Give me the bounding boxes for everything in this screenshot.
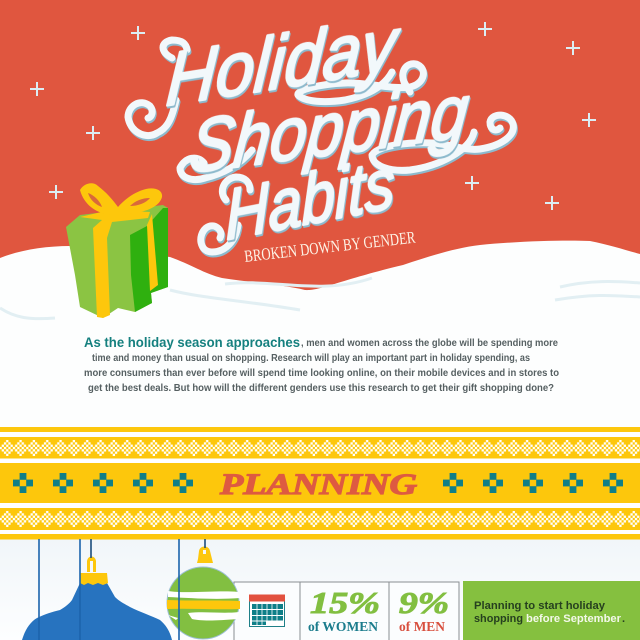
subtitle: BROKEN DOWN BY GENDER <box>243 228 417 266</box>
ornament: green bauble <box>167 546 240 639</box>
stat: women <box>308 585 380 634</box>
intro text block <box>84 334 559 394</box>
banner motifs right <box>443 473 623 493</box>
stat: men: 9% <box>399 585 449 620</box>
gift bow <box>80 183 162 215</box>
title lettering <box>128 0 513 255</box>
panel: green callout: . <box>622 613 625 625</box>
lower section background <box>0 540 640 640</box>
stat: men: of MEN <box>399 619 445 634</box>
ornament: blue bauble <box>22 556 172 640</box>
stat: women: 15% <box>310 585 380 620</box>
panel: red header background <box>0 0 640 300</box>
hanging strings <box>39 539 205 640</box>
sparkle stars <box>30 22 596 210</box>
snow hills <box>0 241 640 440</box>
ornaments <box>22 539 240 640</box>
intro text block: time and money than usual on shopping. Research will play an important part in holiday spending, as <box>92 353 531 364</box>
icon: calendar <box>249 594 285 626</box>
stat: women: of WOMEN <box>308 619 378 634</box>
panel: green callout: before September <box>526 613 622 625</box>
stat: men <box>399 585 449 634</box>
intro text block: , men and women across the globe will be spending more <box>301 338 559 349</box>
title swashes <box>128 40 513 252</box>
panel: green callout: Planning to start holiday <box>474 600 606 612</box>
title line: Shopping: Shopping <box>186 68 472 189</box>
intro lead-in: As the holiday season approaches <box>84 334 300 350</box>
panel: green callout <box>463 581 640 640</box>
intro text block: more consumers than ever before will spend time looking online, on their mobile devices and in stores to <box>84 368 559 379</box>
banner motifs left <box>13 473 193 493</box>
banner heading: PLANNING <box>219 468 417 501</box>
title line: Holiday: Holiday <box>164 0 403 122</box>
intro text block: get the best deals. But how will the different genders use this research to get their gift shopping done? <box>88 383 554 394</box>
panel: statistics table <box>234 582 459 640</box>
panel: green callout: shopping <box>474 613 523 625</box>
panel: planning banner <box>0 427 640 540</box>
icon: gift box <box>66 183 168 318</box>
title line: Habits: Habits <box>225 143 395 255</box>
